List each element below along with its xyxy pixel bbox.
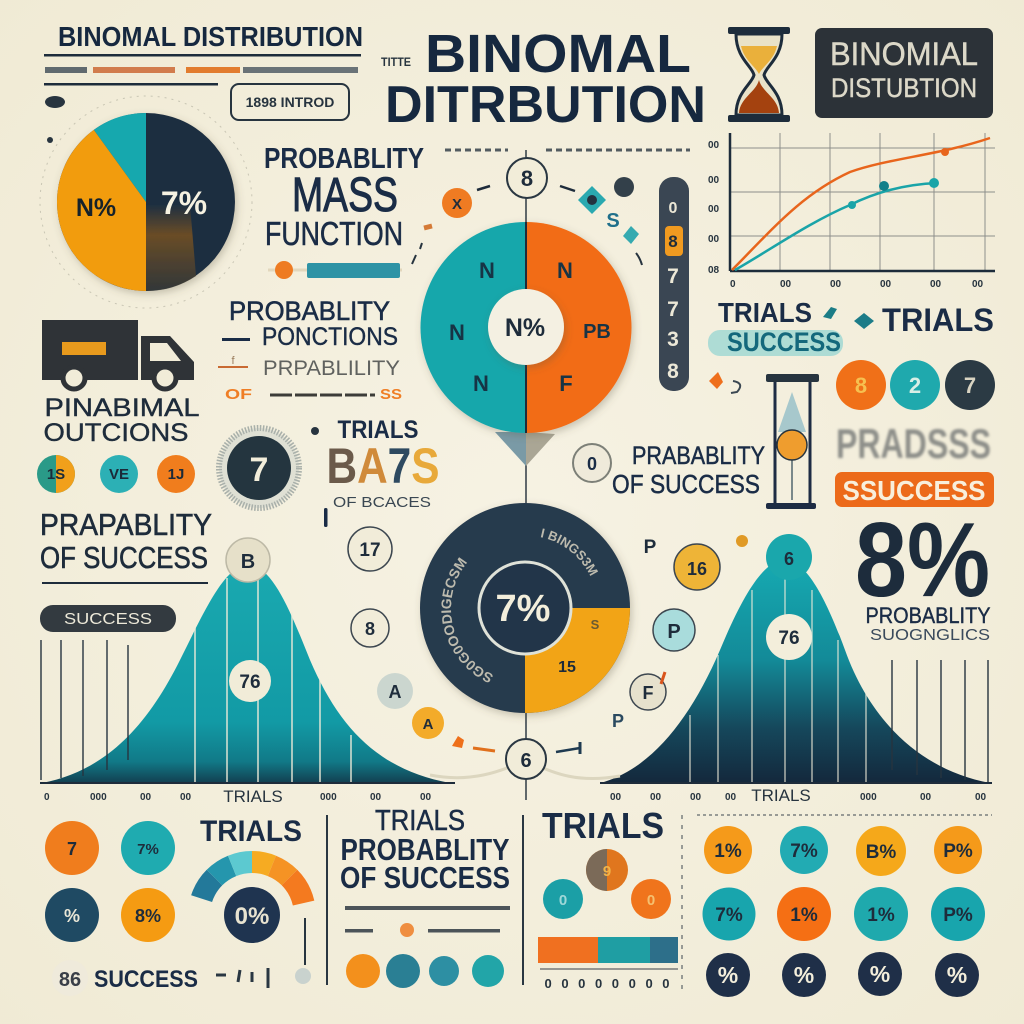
pie chart: N% [76,194,116,222]
heading: trials probability of success bottom: PROBABLITY [340,832,510,867]
text block: probability functions: PROBABLITY [229,296,390,326]
main circle: teal and orange dial: N% [505,314,545,342]
number nodes around dial: 17 [359,540,381,561]
vertical pill with numbers: 7 [667,298,679,321]
vertical pill with numbers: 8 [667,360,679,383]
heading: trials success: SUCCESS [727,327,841,357]
percent grid [702,826,985,997]
number nodes around dial [348,527,748,751]
small arrow [556,742,580,754]
stacked bar: 00000000 [544,976,670,991]
line chart: 08 [708,265,720,276]
number nodes around dial: P [612,711,624,731]
dotted ring around pie [40,96,252,308]
heading: binomial outcomes: OUTCIONS [44,419,188,447]
heading: probability mass function: MASS [292,169,398,222]
line chart: 00 [708,140,720,151]
left bell curve: TRIALS [223,787,283,806]
text block: probability functions: f [231,355,235,367]
right bell curve: 00 [975,792,987,803]
bottom-left circles: 8% [135,906,161,926]
number nodes around dial: 8 [365,619,375,639]
heading: trials probability of success bottom: OF SUCCESS [340,860,510,895]
divider vertical [326,815,328,985]
main circle: teal and orange dial: N [557,258,573,283]
outcome circles: 1S [47,466,65,483]
number circles right: 7 [964,373,976,398]
line chart [708,133,995,290]
heading: probability of success left: OF SUCCESS [40,540,208,575]
right bell curve: 76 [778,628,800,649]
right bell curve: 00 [610,792,622,803]
dark dial: 15 [558,659,576,676]
text block: probability functions [218,296,402,403]
vertical pill with numbers: 0 [669,200,678,217]
top node [507,158,547,198]
heading: trials probability of success bottom [340,805,510,895]
bottom node: 6 [520,750,532,772]
dark title box [815,28,993,118]
dashed header lines [445,148,690,152]
probability subtext [866,603,991,644]
icons around top node: S [606,210,620,232]
left bell curve: 0 [44,792,50,803]
vertical pill with numbers: 8 [668,232,678,251]
main circle: teal and orange dial: N [479,258,495,283]
top node: 8 [521,166,533,191]
number nodes around dial: A [388,682,402,702]
outcome circles [37,455,195,493]
right bell curve: 6 [784,549,794,569]
cluster circles: 0 [559,892,567,909]
line chart: 00 [780,279,792,290]
number nodes around dial: P [667,621,681,643]
text block: probability functions: OF [225,386,252,403]
right bell curve: 00 [650,792,662,803]
small text lines [345,906,510,937]
probability subtext: SUOGNGLICS [870,627,990,644]
divider dashed [681,815,683,990]
number nodes around dial: 16 [687,559,707,579]
icons around top node: X [452,196,462,213]
heading: trials centre-bottom: TRIALS [542,805,664,846]
heading: binomial outcomes [44,394,200,447]
outcome circles: VE [109,466,129,483]
vertical pill with numbers [659,177,689,391]
success orange banner: SSUCCESS [842,475,986,506]
main title: DITRBUTION [385,76,706,134]
dark dial: I BINGS3M [540,528,598,576]
line chart: 0 [730,279,736,290]
heading: trials success [708,297,843,357]
percent grid: P% [943,905,973,926]
slider bar [268,261,402,279]
heading: probability of success centre right: PRABABLITY [632,442,765,470]
main circle: teal and orange dial: F [559,371,573,396]
cluster circles: 9 [603,863,611,880]
left bell curve: 00 [140,792,152,803]
badge: 7 [219,428,299,508]
heading: trials right: TRIALS [882,302,994,338]
small orange icon [709,372,740,393]
text block: probability functions: PRPABLILITY [263,357,400,380]
main circle: teal and orange dial: PB [583,321,611,343]
heading: probability of success centre right: 0 [587,454,597,474]
dark dial [418,502,636,720]
line chart: 00 [830,279,842,290]
number circles right: 2 [909,373,921,398]
main circle: teal and orange dial [421,222,632,466]
main title: TITTE [381,55,411,69]
number nodes around dial: P [644,537,657,558]
icons around top node [412,177,642,265]
bottom node [506,739,546,779]
percent grid: B% [866,842,896,863]
label pill [231,84,349,120]
percent grid: % [947,962,967,988]
badge: 7: 7 [250,451,268,489]
left bell curve: 000 [320,792,337,803]
right bell curve: 000 [860,792,877,803]
left bell curve: 76 [239,672,261,693]
right bell curve: 00 [920,792,932,803]
percent grid: 7% [790,841,818,862]
text block: trials bars: TRIALS [338,416,418,444]
heading: trials success: TRIALS [718,297,812,328]
text block: trials bars: OF BCACES [333,494,431,511]
pie chart: 7% [161,185,207,221]
text block: probability functions: PONCTIONS [262,323,398,351]
right bell curve: 00 [690,792,702,803]
percent grid: 1% [714,841,742,862]
dark title box: BINOMIAL [830,36,978,72]
percent grid: P% [943,841,973,862]
bottom-left circles: 7 [67,839,77,859]
success pill [40,605,176,632]
dark title box: DISTUBTION [831,73,977,103]
text block: trials bars: BA7S [326,438,440,494]
success pill: SUCCESS [64,611,152,628]
percent grid: % [718,962,738,988]
base arcs joining curves [430,760,620,779]
percent grid: % [794,962,814,988]
number circles right [836,360,995,410]
icon: small marker [45,96,65,143]
success label: SUCCESS [94,966,198,993]
icon: hourglass lower [766,374,819,509]
main circle: teal and orange dial: N [473,371,489,396]
left bell curve: 00 [370,792,382,803]
heading: probability mass function [264,143,424,252]
gauge: 0% [235,903,269,930]
right bell curve: TRIALS [751,786,811,805]
main circle: teal and orange dial: N [449,320,465,345]
heading: probability of success left [40,507,212,584]
vertical pill with numbers: 7 [667,265,679,288]
line chart: 00 [972,279,984,290]
heading: probability of success centre right: OF SUCCESS [612,469,760,499]
cluster circles [543,849,671,919]
axis: centre line [525,150,527,800]
line chart: 00 [708,234,720,245]
main title [381,24,706,134]
percent grid: 1% [790,905,818,926]
heading: probability mass function: FUNCTION [265,215,403,252]
big percent: 8% [855,501,990,619]
success label [52,960,311,996]
heading: binomial outcomes: PINABIMAL [44,394,200,422]
icon: delivery truck [42,320,194,389]
dark dial: SG0G0OODIGECSM [441,557,493,682]
text block: probability functions: SS [380,386,402,403]
percent grid: 1% [867,905,895,926]
heading: top-left title: BINOMAL DISTRIBUTION [58,21,363,52]
vertical pill with numbers: 3 [667,328,679,351]
bottom-left circles [45,821,175,942]
heading: probability of success centre right [573,442,765,499]
heading: probability mass function: PROBABLITY [264,143,424,175]
right bell curve [600,534,992,805]
line chart: 00 [708,175,720,186]
pie chart [57,113,235,291]
line chart: 00 [708,204,720,215]
number nodes around dial: A [423,716,434,733]
heading: probability of success left: PRAPABLITY [40,507,212,542]
left bell curve [40,538,455,806]
text block: trials bars [311,416,440,527]
heading: trials probability of success bottom: TRIALS [375,805,465,837]
percent grid: % [870,961,890,987]
icon: hourglass top [728,27,790,122]
left bell curve: B [241,551,255,573]
bottom-left circles: 7% [137,841,159,858]
stacked bar [538,937,678,991]
cluster circles: 0 [647,892,655,909]
left bell curve: 00 [420,792,432,803]
number circles right: 8 [855,373,867,398]
outcome circles: 1J [168,466,184,483]
dark dial: 7% [496,588,550,630]
percent grid: 7% [715,905,743,926]
probability subtext: PROBABLITY [866,603,991,628]
success label: 86 [59,969,81,991]
heading: trials gauge: TRIALS [200,815,302,848]
number nodes around dial: F [642,683,654,703]
bottom-left circles: % [64,906,80,926]
four dots [346,954,504,988]
dark dial: S [591,617,600,632]
line chart: 00 [880,279,892,290]
label pill: 1898 INTROD [246,94,334,110]
line chart: 00 [930,279,942,290]
left bell curve: 000 [90,792,107,803]
main title: BINOMAL [425,24,691,84]
right bell curve: 00 [725,792,737,803]
left bell curve: 00 [180,792,192,803]
gauge [202,862,305,965]
heading: top-left title [44,21,363,86]
